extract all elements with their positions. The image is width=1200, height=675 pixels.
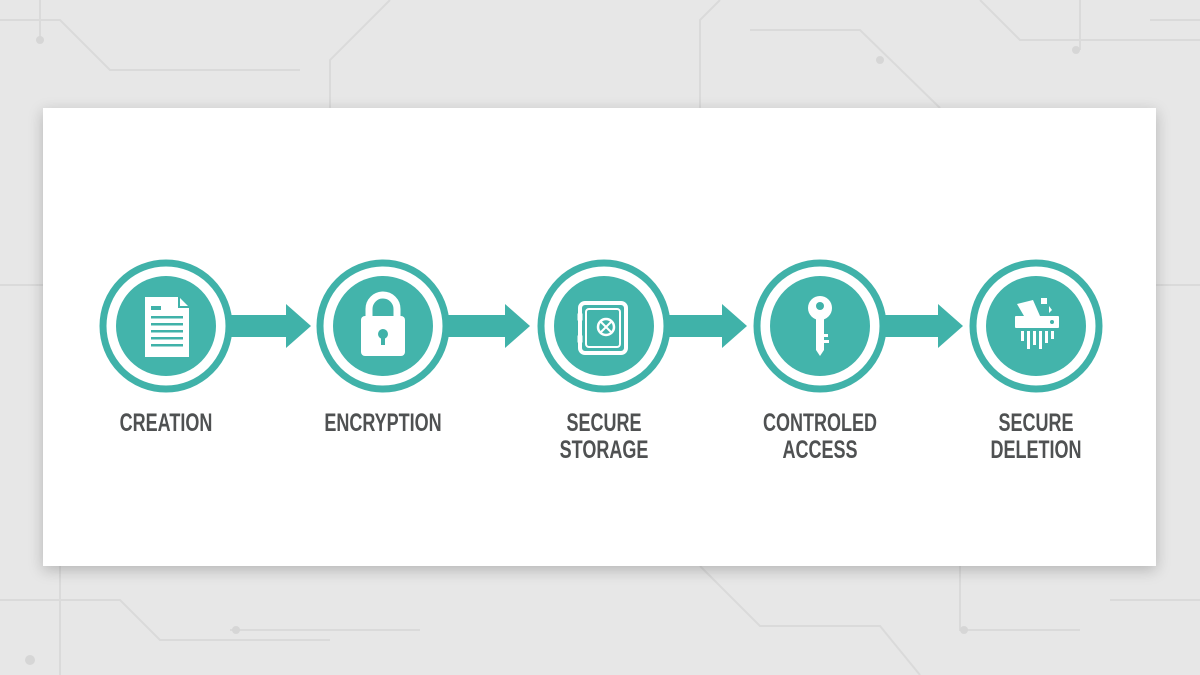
arrow 4 bbox=[882, 304, 963, 348]
label: controlled access bbox=[763, 409, 877, 464]
icon: shredder bbox=[1015, 298, 1059, 349]
label: secure storage: SECURE bbox=[566, 409, 642, 437]
step 4 circle: controlled access bbox=[757, 263, 883, 389]
label: secure deletion: DELETION bbox=[990, 436, 1082, 464]
step 1 circle: creation bbox=[103, 263, 229, 389]
icon: document bbox=[145, 297, 189, 357]
arrow 3 bbox=[666, 304, 747, 348]
arrow 1 bbox=[228, 304, 311, 348]
label: encryption: ENCRYPTION bbox=[324, 409, 442, 437]
label: secure deletion bbox=[990, 409, 1082, 464]
label: controlled access: ACCESS bbox=[782, 436, 858, 464]
step 2 circle: encryption bbox=[320, 263, 446, 389]
arrow 2 bbox=[445, 304, 530, 348]
step 3 circle: secure storage bbox=[541, 263, 667, 389]
label: secure deletion: SECURE bbox=[998, 409, 1074, 437]
icon: padlock bbox=[361, 295, 405, 356]
icon: key bbox=[808, 296, 832, 356]
label: secure storage bbox=[560, 409, 648, 464]
label: secure storage: STORAGE bbox=[560, 436, 648, 464]
label: controlled access: CONTROLED bbox=[763, 409, 877, 437]
step 5 circle: secure deletion bbox=[973, 263, 1099, 389]
main card bbox=[43, 108, 1156, 566]
icon: safe bbox=[578, 303, 626, 353]
label: creation: CREATION bbox=[120, 409, 212, 437]
